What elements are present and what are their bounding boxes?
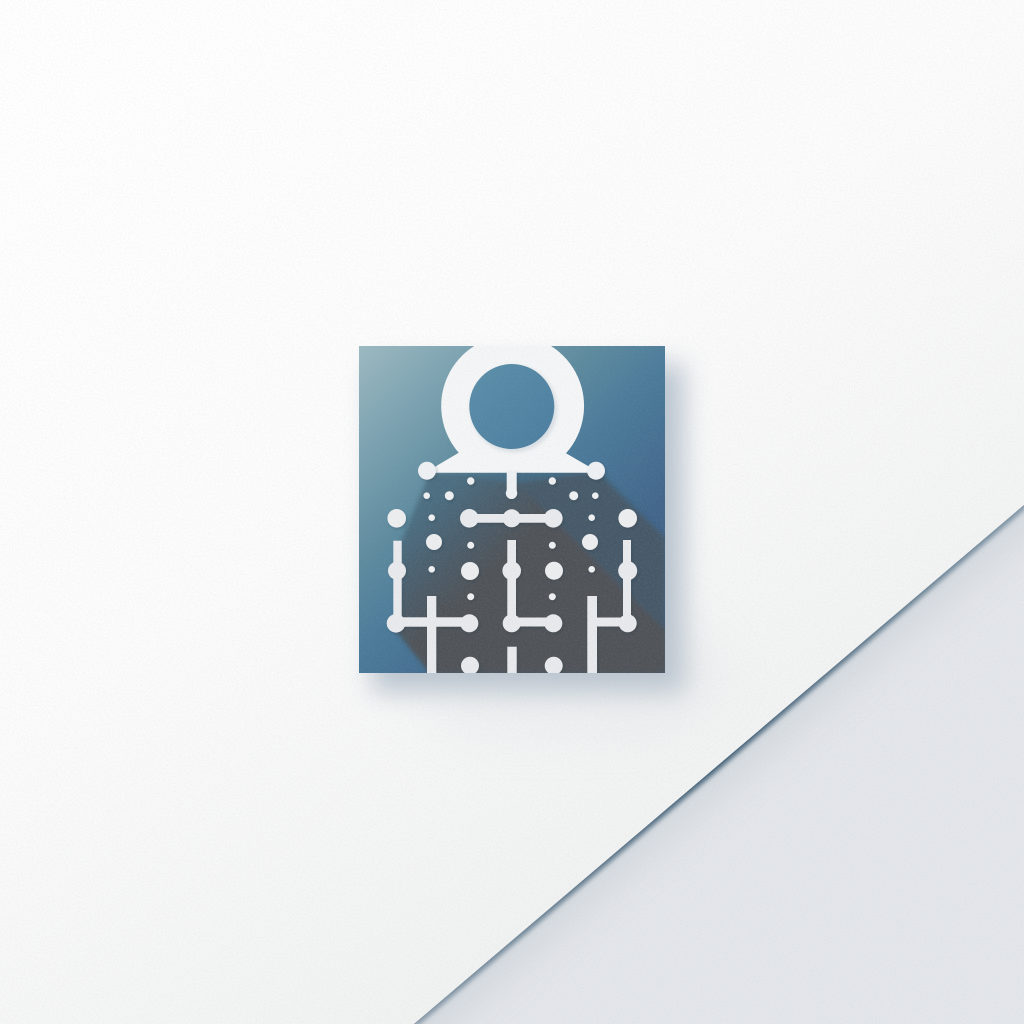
head ring: [435, 346, 588, 473]
center trace: [502, 540, 562, 632]
left trace: [387, 541, 478, 633]
large dots: [387, 509, 637, 580]
emblem cast shadow: [372, 364, 730, 730]
top horizontal trace: [460, 509, 563, 528]
circuit traces: [387, 509, 637, 677]
lower-right paper triangle with fold shadow: [414, 505, 1024, 1024]
small dots: [423, 477, 599, 600]
head inner disc: [469, 364, 557, 452]
right trace: [592, 540, 637, 632]
lower verticals and feet: [427, 596, 597, 677]
shoulder nodes and stem: [418, 462, 605, 499]
long diagonal shadow of figure: [392, 470, 665, 673]
emblem: blue square: [359, 335, 665, 677]
